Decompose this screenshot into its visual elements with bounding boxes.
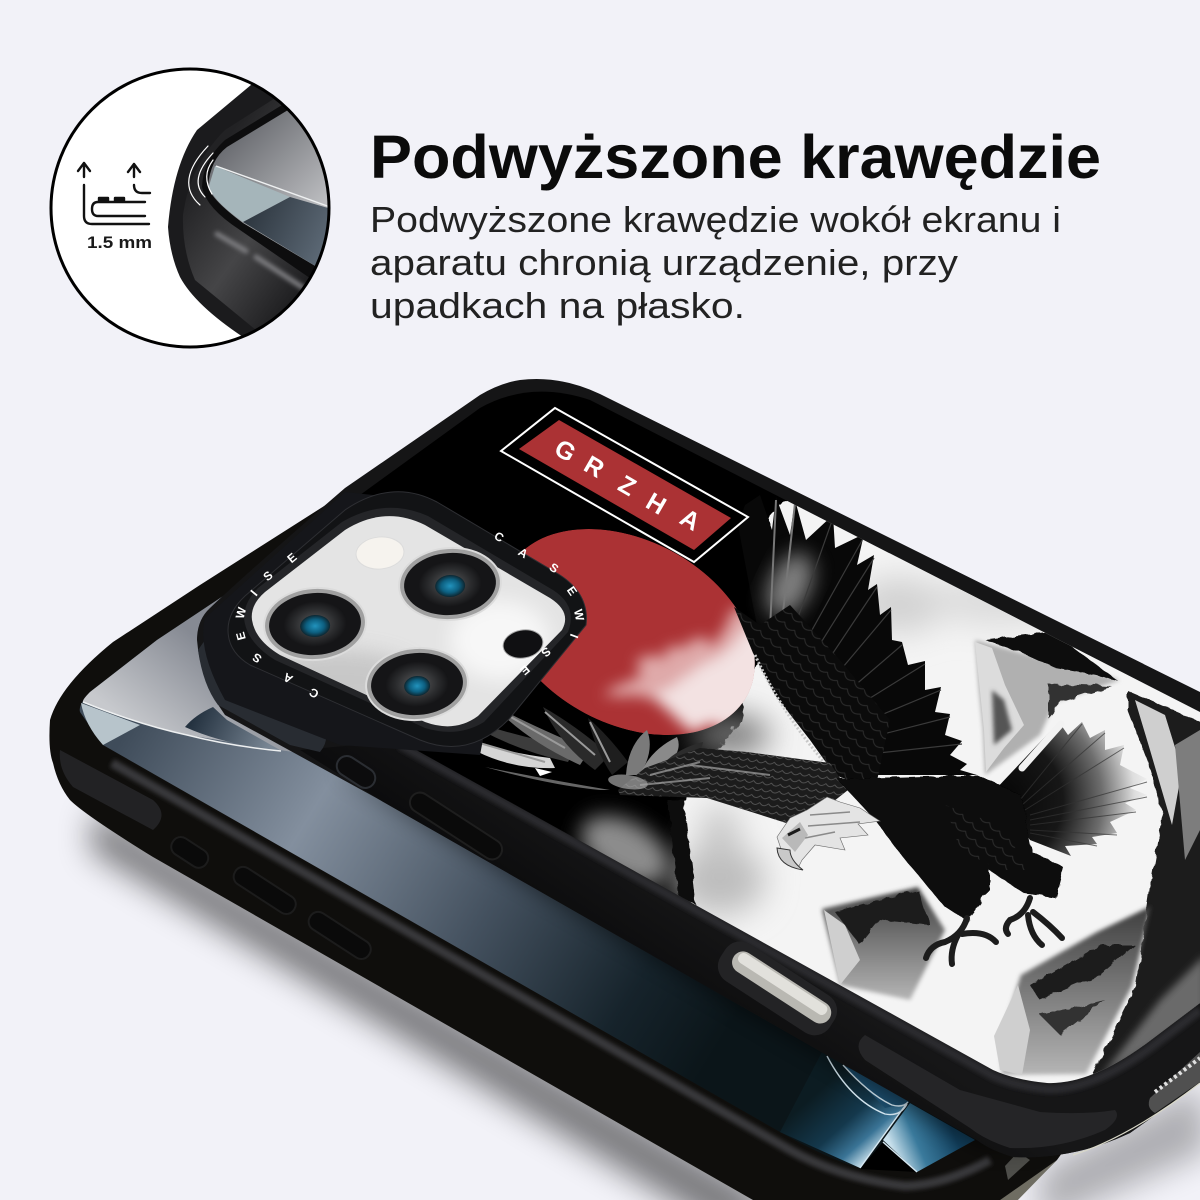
ring lettering: CASEWISE left: I (248, 587, 260, 599)
eagle: left wing fan (480, 707, 703, 790)
top phone rim sheen (400, 745, 1200, 1089)
ring lettering: CASEWISE right: E (517, 662, 533, 678)
lens: top (396, 543, 504, 625)
label outline (501, 408, 748, 562)
camera bump base (203, 492, 510, 755)
red sun (522, 529, 755, 735)
eagle: body feathers (945, 805, 1030, 870)
ring lettering: CASEWISE right: S (538, 644, 554, 660)
label text: Z (613, 470, 641, 502)
top phone case (197, 379, 1200, 1157)
ink edge beside cloud (668, 800, 696, 905)
eagle: tail feather lines (1020, 724, 1147, 846)
grey cloud wash (675, 574, 1070, 915)
rear bumper rim sheen (112, 763, 990, 1186)
grey ink below wing (568, 802, 676, 889)
ring lettering: CASEWISE left: W (233, 605, 249, 620)
camera inner bevel (244, 508, 571, 732)
eagle: body (837, 775, 1063, 921)
inset screen pale wedge (209, 166, 290, 222)
eagle: talons right (1006, 898, 1062, 945)
top phone (197, 370, 1200, 1157)
blue panel left (780, 1052, 907, 1168)
eagle: wing hub (608, 774, 648, 790)
label: 1.5 mm: 1.5 mm (87, 234, 152, 252)
rear phone screen (80, 545, 1000, 1172)
blue panel right (883, 1103, 975, 1172)
eagle: wing leading edge (754, 654, 826, 762)
blue reflection (780, 1052, 975, 1172)
label text: G (550, 434, 580, 468)
top phone soft shadow (330, 770, 1040, 1150)
inset screen (208, 110, 328, 266)
camera module (203, 492, 587, 755)
ring lettering: CASEWISE left: A (280, 670, 295, 686)
eagle: beak (777, 848, 803, 870)
ring lettering: CASEWISE left: E (284, 550, 300, 566)
printed artwork (362, 392, 1200, 1084)
rear phone (49, 487, 1100, 1200)
inset screen reflection line (216, 166, 330, 207)
ring lettering: CASEWISE left: S (260, 568, 276, 584)
eagle: wing mottling (758, 546, 822, 624)
speaker holes (1149, 1052, 1200, 1113)
black triangle (860, 1142, 917, 1172)
camera glass plate (252, 516, 565, 726)
corner carbon bumper: right (858, 1035, 1117, 1148)
artwork black base (362, 392, 968, 1056)
rear phone bumper (49, 487, 1100, 1200)
outer rim highlight (1073, 1083, 1200, 1155)
corner shadow (1040, 1085, 1200, 1200)
ring lettering: CASEWISE right: W (571, 608, 587, 623)
lens: bottom (363, 643, 471, 725)
inset screen dark wedge (243, 197, 328, 266)
eagle (448, 495, 1147, 964)
rear phone end edge (993, 1160, 1057, 1200)
rear screen pale wedge (81, 703, 140, 745)
ring lettering: CASEWISE right: E (564, 584, 580, 598)
eagle: tail (994, 722, 1147, 856)
eagle: feather separators (770, 500, 962, 755)
eagle: head plumage (805, 812, 860, 838)
body text (370, 199, 1061, 326)
side button: mic hole (333, 752, 379, 792)
heading: Podwyższone krawędzie (370, 123, 1101, 191)
mountain: lower middle (822, 887, 945, 1000)
ring lettering: CASEWISE left: S (250, 650, 264, 666)
rear bumper carbon pad (60, 750, 161, 830)
microphone hole (501, 627, 545, 661)
brand label (501, 408, 748, 562)
inset phone frame (168, 84, 274, 336)
mountain: lower right (994, 906, 1151, 1075)
rear screen reflection line (83, 702, 281, 751)
phone shadow (90, 810, 780, 1200)
mountain: right dark ridge (1090, 691, 1200, 1080)
label text: H (641, 487, 671, 521)
ring lettering: CASEWISE right: A (516, 545, 531, 561)
blue upper wedge (843, 1065, 912, 1108)
side button: power (406, 789, 506, 863)
body text: Podwyższone krawędzie wokół ekranu i (370, 199, 1061, 240)
inset frame bumper highlight (183, 99, 302, 329)
silver side key (711, 935, 844, 1042)
rear screen grey reflection (83, 545, 345, 760)
inset rim highlights (217, 234, 302, 287)
speaker teeth highlight (1155, 1058, 1200, 1092)
rear button: volume up (230, 863, 299, 917)
ring lettering: CASEWISE right: S (547, 560, 561, 576)
eagle: talons left (926, 918, 996, 964)
eagle: wing arm highlights (640, 762, 770, 785)
ring lettering: CASEWISE right (492, 529, 587, 678)
sun white wash (600, 602, 755, 734)
ring lettering: CASEWISE right: C (492, 529, 507, 545)
body text: aparatu chronią urządzenie, przy (370, 242, 958, 283)
label text: R (579, 450, 609, 484)
eagle: face shading (782, 822, 808, 852)
label text (550, 434, 705, 537)
eagle: head (777, 797, 880, 868)
lens: left (261, 583, 369, 665)
inset circle: raised edge close-up (51, 69, 340, 350)
rear speaker grille (1005, 1152, 1030, 1180)
watercolor sky (676, 490, 1200, 1095)
mountain: upper middle (975, 632, 1120, 775)
inset frame dark inner lip (202, 106, 314, 277)
ring lettering: CASEWISE right: I (567, 632, 581, 640)
icon: raised edge diagram (78, 163, 150, 224)
ring lettering: CASEWISE left: C (306, 685, 321, 701)
ring lettering: CASEWISE left (233, 550, 321, 701)
rear button: volume down (305, 908, 374, 962)
rear screen dark notch (185, 707, 280, 750)
label text: A (675, 503, 705, 537)
flash (355, 535, 405, 571)
eagle: tail white feather (1022, 724, 1061, 768)
camera ring (228, 492, 586, 746)
corner carbon bumper: left (198, 640, 326, 752)
ring lettering: CASEWISE left: E (233, 630, 249, 642)
eagle: upper wing silhouette (760, 504, 977, 775)
eagle: wing coverts (734, 605, 890, 790)
white swoosh lines (827, 1056, 917, 1172)
body text: upadkach na płasko. (370, 285, 745, 326)
label red bar (519, 420, 731, 550)
top phone side band (300, 741, 1200, 1157)
inset impact arcs (189, 146, 213, 205)
eagle: left wing arm (618, 748, 848, 828)
glass shading (260, 600, 550, 710)
eagle: eye (788, 829, 800, 835)
rear button: action (168, 834, 212, 871)
